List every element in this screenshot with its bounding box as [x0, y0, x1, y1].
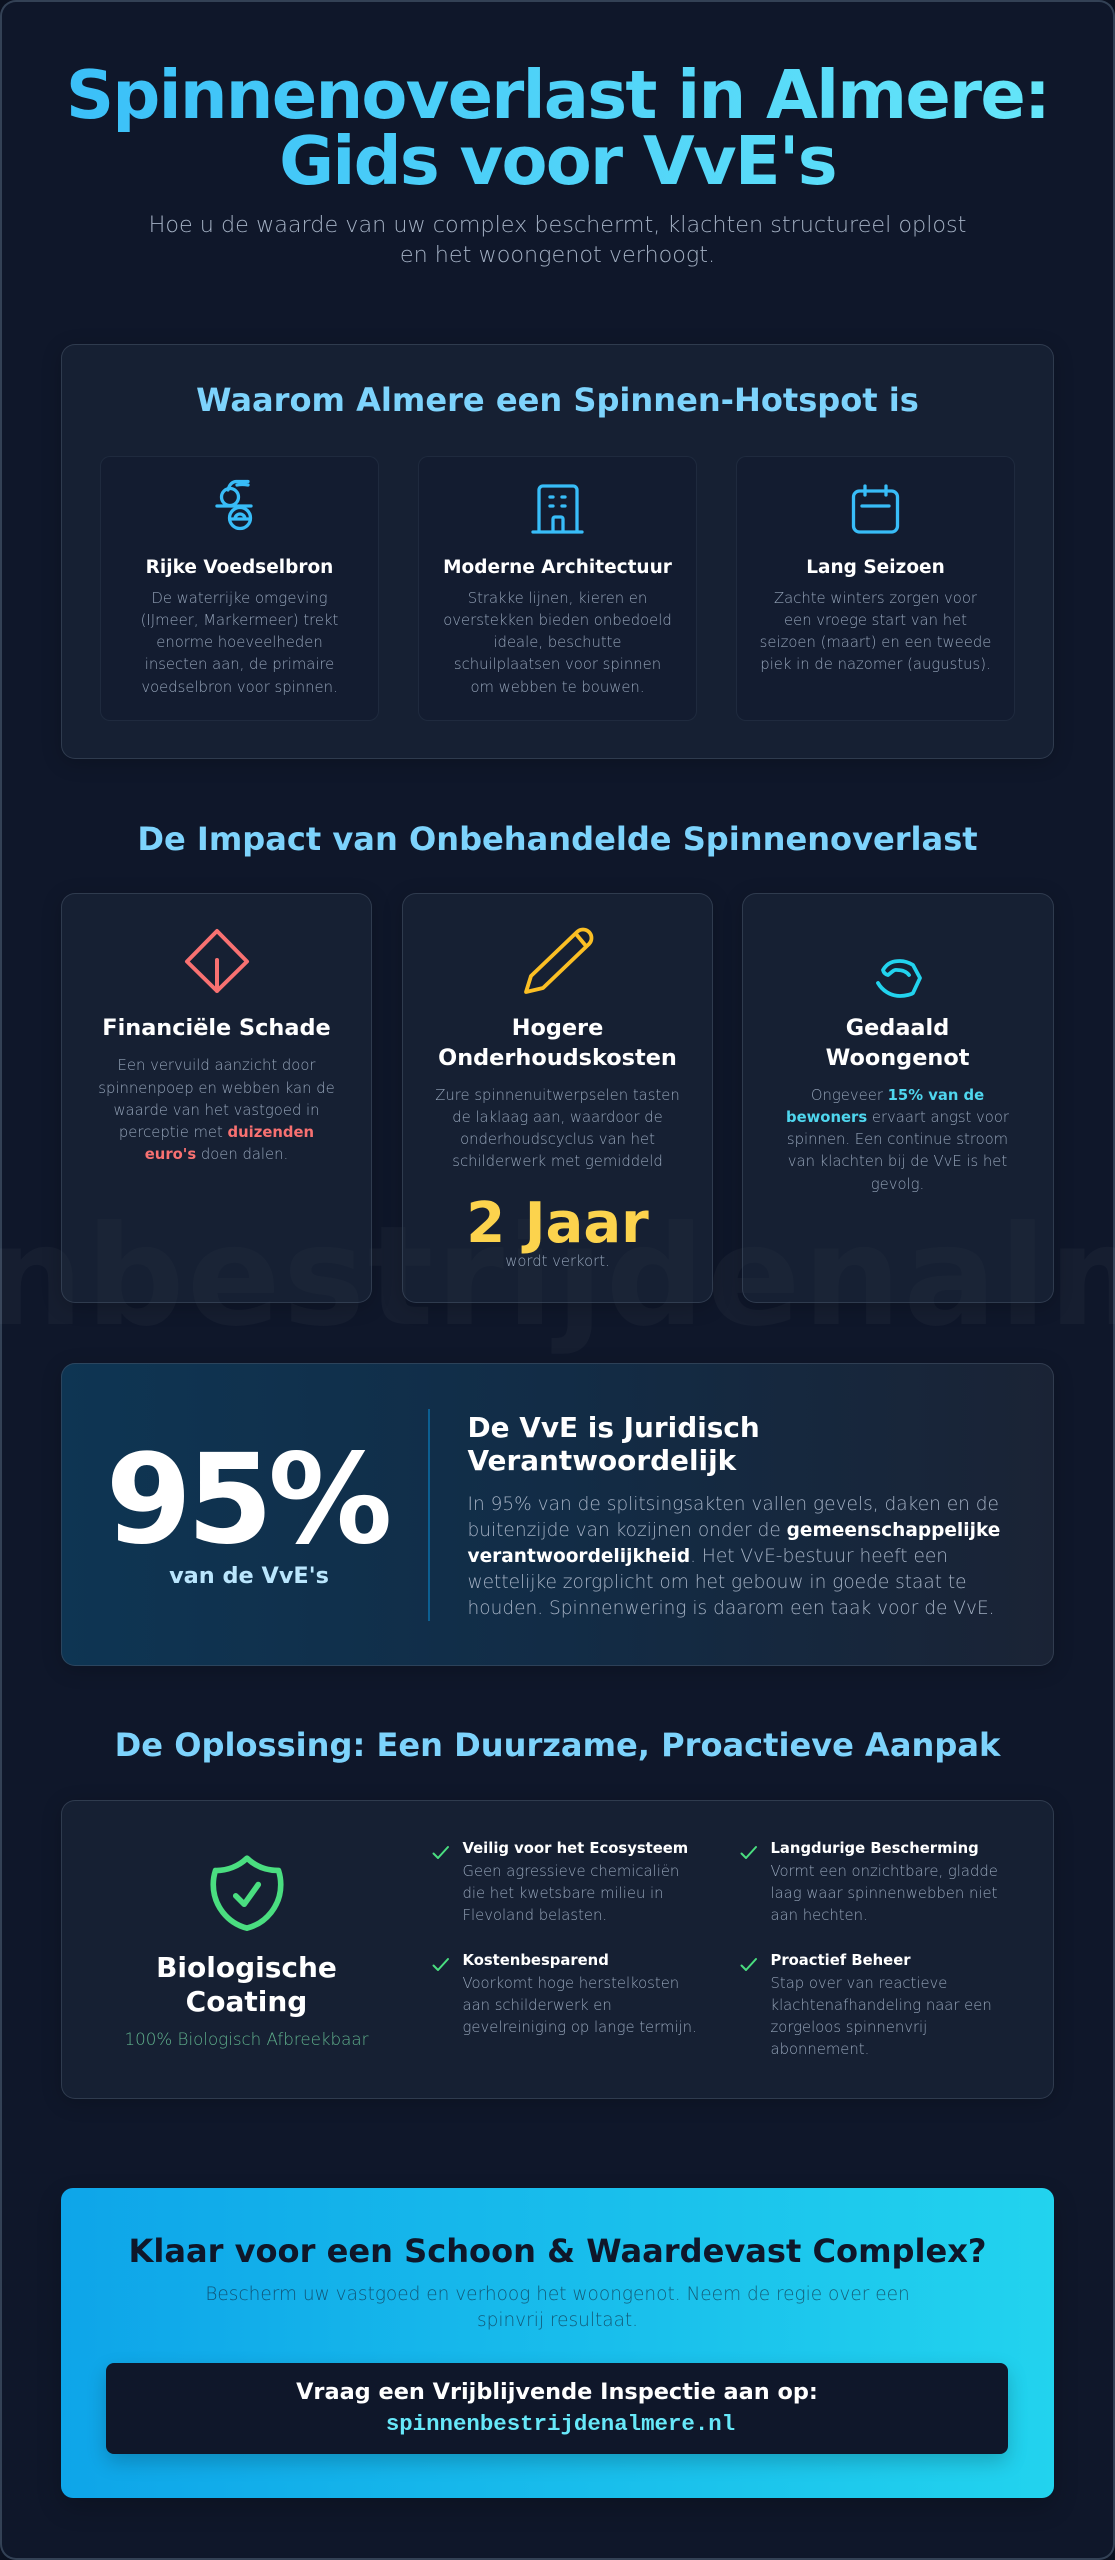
benefit text — [462, 1952, 697, 2036]
body text: verantwoordelijkheid. Het VvE-bestuur heeft een — [468, 1546, 948, 1567]
benefit text: Stap over van reactieve — [770, 1974, 947, 1992]
benefit text: abonnement. — [770, 2041, 869, 2058]
title: Spinnenoverlast in Almere: — [66, 56, 1049, 134]
card text: van klachten bij de VvE is het — [788, 1153, 1007, 1170]
CTA text: Bescherm uw vastgoed en verhoog het woongenot. Neem de regie over een — [205, 2284, 910, 2305]
card text: De waterrijke omgeving — [151, 590, 328, 607]
card: hogere onderhoudskosten — [402, 893, 713, 1303]
card text — [98, 1057, 335, 1163]
card text: onderhoudscyclus van het — [460, 1131, 655, 1148]
big stat: 95%: 95% — [106, 1428, 387, 1572]
panel: juridische verantwoordelijkheid — [61, 1363, 1054, 1666]
card title — [826, 1015, 969, 1071]
card title: Hogere — [512, 1015, 603, 1041]
card title: Lang Seizoen — [806, 557, 945, 578]
card text: seizoen (maart) en een tweede — [760, 634, 991, 651]
card text: waarde van het vastgoed in — [113, 1102, 320, 1119]
CTA text: spinvrij resultaat. — [477, 2310, 638, 2331]
benefit text: aan hechten. — [770, 1907, 868, 1924]
stat caption: van de VvE's — [169, 1563, 329, 1589]
icon: check — [432, 1846, 449, 1859]
card text: Zure spinnenuitwerpselen tasten — [435, 1087, 680, 1104]
card text: enorme hoeveelheden — [156, 634, 323, 651]
icon: bicycle glyph — [215, 480, 253, 530]
card: moderne architectuur — [418, 456, 697, 721]
benefit text: zorgeloos spinnenvrij — [770, 2019, 927, 2036]
benefit text: Proactief Beheer — [770, 1952, 911, 1969]
divider — [428, 1409, 430, 1621]
card text: schuilplaatsen voor spinnen — [454, 656, 661, 673]
card title: Rijke Voedselbron — [146, 557, 333, 578]
product name — [156, 1951, 337, 2018]
benefit text: aan schilderwerk en — [462, 1997, 612, 2014]
benefit: ecosysteem — [432, 1840, 688, 1924]
card text: piek in de nazomer (augustus). — [760, 656, 991, 673]
card text: spinnen. Een continue stroom — [787, 1131, 1008, 1148]
icon: calendar — [852, 484, 900, 534]
heading: impact: De Impact van Onbehandelde Spinnenoverlast — [137, 820, 978, 858]
card text — [435, 1087, 680, 1170]
card title: Gedaald — [846, 1015, 949, 1041]
card text: overstekken bieden onbedoeld — [443, 612, 672, 629]
benefit text: Langdurige Bescherming — [770, 1840, 979, 1857]
heading: Verantwoordelijk — [468, 1444, 736, 1476]
card title — [438, 1015, 677, 1071]
card text: voedselbron voor spinnen. — [141, 679, 338, 696]
CTA text — [205, 2284, 910, 2331]
icon: shield check — [210, 1855, 284, 1931]
card text: Een vervuild aanzicht door — [118, 1057, 315, 1074]
CTA line: Vraag een Vrijblijvende Inspectie aan op: — [296, 2379, 818, 2405]
card text — [760, 590, 991, 673]
benefit text: Vormt een onzichtbare, gladde — [770, 1862, 998, 1880]
product tag: 100% Biologisch Afbreekbaar — [125, 2029, 368, 2049]
benefit text — [462, 1840, 688, 1924]
icon: check — [432, 1958, 449, 1971]
card text: Zachte winters zorgen voor — [774, 590, 977, 607]
card text: om webben te bouwen. — [470, 679, 645, 696]
heading: waarom Almere: Waarom Almere een Spinnen-Hotspot is — [196, 381, 919, 419]
icon: pencil — [524, 928, 594, 994]
card text: een vroege start van het — [784, 612, 967, 629]
heading: De VvE is Juridisch — [468, 1410, 760, 1444]
card text: Strakke lijnen, kieren en — [468, 590, 647, 607]
card title: Moderne Architectuur — [443, 557, 672, 578]
benefit text: klachtenafhandeling naar een — [770, 1997, 992, 2014]
CTA box — [106, 2363, 1008, 2454]
benefit text — [770, 1952, 992, 2058]
heading — [468, 1410, 760, 1476]
panel: waarom Almere een hotspot is — [61, 344, 1054, 759]
card text: ideale, beschutte — [493, 634, 622, 651]
benefit text: Geen agressieve chemicaliën — [462, 1862, 679, 1880]
body text: wettelijke zorgplicht om het gebouw in goede staat te — [468, 1572, 967, 1593]
card text — [786, 1087, 1009, 1193]
body text: houden. Spinnenwering is daarom een taak voor de VvE. — [468, 1598, 995, 1619]
title: Gids voor VvE's — [279, 122, 836, 200]
number caption: wordt verkort. — [505, 1253, 610, 1270]
card text: Ongeveer 15% van de — [811, 1087, 984, 1104]
CTA heading: Klaar voor een Schoon & Waardevast Complex? — [128, 2232, 987, 2270]
benefit: kostenbesparend — [432, 1952, 697, 2036]
icon: check — [740, 1958, 757, 1971]
heading: oplossing: De Oplossing: Een Duurzame, Proactieve Aanpak — [115, 1726, 1000, 1764]
card title: Financiële Schade — [102, 1015, 331, 1041]
benefit text: die het kwetsbare milieu in — [462, 1885, 664, 1902]
card title: Onderhoudskosten — [438, 1045, 677, 1071]
card text: bewoners ervaart angst voor — [786, 1109, 1009, 1126]
card text: insecten aan, de primaire — [145, 656, 334, 673]
card: financiele schade — [61, 893, 372, 1303]
benefit text: Veilig voor het Ecosysteem — [462, 1840, 688, 1857]
card: gedaald woongenot — [742, 893, 1054, 1303]
card text — [443, 590, 672, 696]
icon: building — [531, 484, 584, 534]
subtitle: Hoe u de waarde van uw complex beschermt, klachten structureel oplost — [149, 212, 966, 238]
panel: call to action — [61, 2188, 1054, 2498]
icon: hand wave — [876, 959, 922, 998]
benefit text — [770, 1840, 998, 1924]
card text: perceptie met duizenden — [119, 1124, 314, 1141]
card text: schilderwerk met gemiddeld — [452, 1153, 663, 1170]
benefit: proactief beheer — [740, 1952, 992, 2058]
benefit text: Flevoland belasten. — [462, 1907, 607, 1924]
panel: oplossing — [61, 1800, 1054, 2099]
card text — [141, 590, 338, 696]
benefit text: laag waar spinnenwebben niet — [770, 1885, 997, 1902]
card text: de laklaag aan, waardoor de — [452, 1109, 663, 1126]
card: rijke voedselbron — [100, 456, 379, 721]
website address: spinnenbestrijdenalmere.nl — [386, 2411, 735, 2437]
benefit text: Voorkomt hoge herstelkosten — [462, 1974, 679, 1992]
subtitle — [149, 212, 966, 268]
benefit text: Kostenbesparend — [462, 1952, 609, 1969]
title — [0, 62, 1115, 194]
body text — [468, 1494, 1000, 1619]
big number: 2 jaar: 2 Jaar — [466, 1191, 649, 1256]
body text: buitenzijde van kozijnen onder de gemeenschappelijke — [468, 1520, 1000, 1541]
product name: Biologische — [156, 1951, 337, 1984]
benefit: langdurige bescherming — [740, 1840, 998, 1924]
benefit text: gevelreiniging op lange termijn. — [462, 2019, 697, 2036]
icon: diamond with arrow — [184, 928, 250, 994]
card title: Woongenot — [826, 1045, 969, 1071]
card text: euro's doen dalen. — [145, 1146, 288, 1163]
body text: In 95% van de splitsingsakten vallen gevels, daken en de — [468, 1494, 999, 1515]
icon: check — [740, 1846, 757, 1859]
product name: Coating — [186, 1985, 307, 2018]
card text: gevolg. — [871, 1176, 924, 1193]
subtitle: en het woongenot verhoogt. — [400, 242, 715, 268]
card: lang seizoen — [736, 456, 1015, 721]
card text: spinnenpoep en webben kan de — [98, 1080, 335, 1096]
card text: (IJmeer, Markermeer) trekt — [141, 612, 338, 629]
